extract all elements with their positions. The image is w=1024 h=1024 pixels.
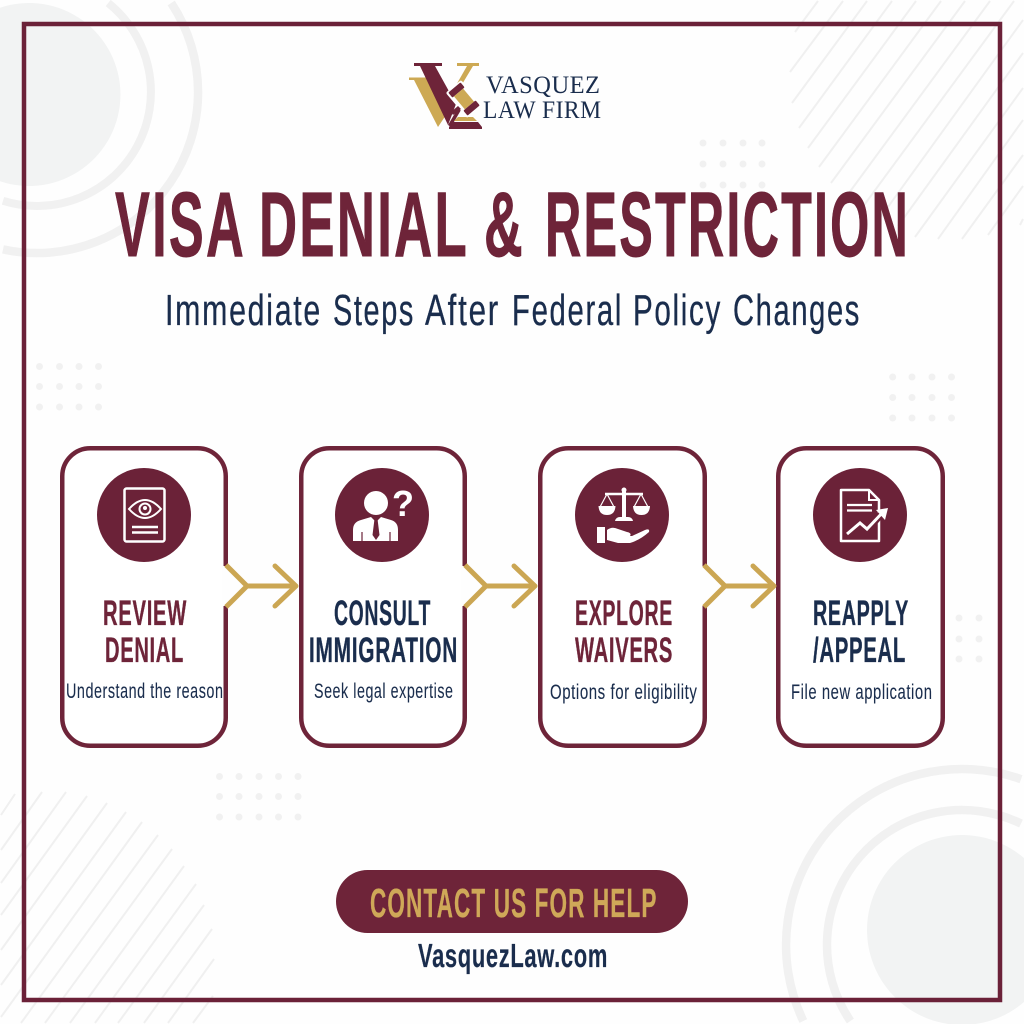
heading: immigration: IMMIGRATION <box>309 631 458 670</box>
heading: denial: DENIAL <box>105 631 184 670</box>
heading: waivers: WAIVERS <box>575 631 673 670</box>
logo mark: V and gavel <box>409 63 482 129</box>
title: & <box>484 174 525 276</box>
description: File new application <box>791 681 932 704</box>
heading: consult: CONSULT <box>334 594 431 633</box>
description: Understand the reason <box>66 680 224 703</box>
step card 1: review denial <box>62 448 226 746</box>
heading: review: REVIEW <box>103 594 187 633</box>
background stripes: top right <box>790 1 1023 239</box>
icon: person with question mark: ? <box>392 483 414 524</box>
description: Seek legal expertise <box>314 680 454 703</box>
subtitle: Immediate <box>165 286 322 335</box>
heading: appeal: /APPEAL <box>813 631 906 670</box>
background dots <box>36 140 982 820</box>
button label: CONTACT US FOR HELP <box>370 880 658 926</box>
arrow: step 2 to step 3 <box>461 565 535 607</box>
subtitle: Steps <box>333 286 415 335</box>
subtitle: Policy <box>633 286 722 335</box>
subtitle <box>165 286 861 335</box>
icon: document with eye <box>97 468 191 562</box>
icon: person with question mark <box>335 468 429 562</box>
icon: document with rising chart <box>813 468 907 562</box>
website: VasquezLaw.com <box>418 938 608 975</box>
icon: scales over hand <box>575 468 669 562</box>
heading: explore: EXPLORE <box>575 594 673 633</box>
title <box>115 174 910 276</box>
arrow: step 3 to step 4 <box>700 565 774 607</box>
step card 2: consult immigration <box>301 448 465 746</box>
heading: reapply: REAPPLY <box>813 594 909 633</box>
subtitle: Federal <box>512 286 623 335</box>
subtitle: After <box>425 286 500 335</box>
logo wordmark: Law Firm: LAW FIRM <box>483 97 602 124</box>
call to action button <box>336 870 688 933</box>
arrow: step 1 to step 2 <box>222 565 296 607</box>
logo <box>409 63 602 129</box>
background circles: top left <box>0 3 198 253</box>
step card 4: reapply / appeal <box>778 448 943 746</box>
logo wordmark: Vasquez: VASQUEZ <box>486 72 600 99</box>
description: Options for eligibility <box>550 681 698 704</box>
title: DENIAL <box>259 174 469 276</box>
subtitle: Changes <box>733 286 861 335</box>
background circles: bottom right <box>786 769 1024 1024</box>
step card 3: explore waivers <box>540 448 705 746</box>
background stripes: bottom left <box>1 792 214 1023</box>
title: VISA <box>115 174 246 276</box>
